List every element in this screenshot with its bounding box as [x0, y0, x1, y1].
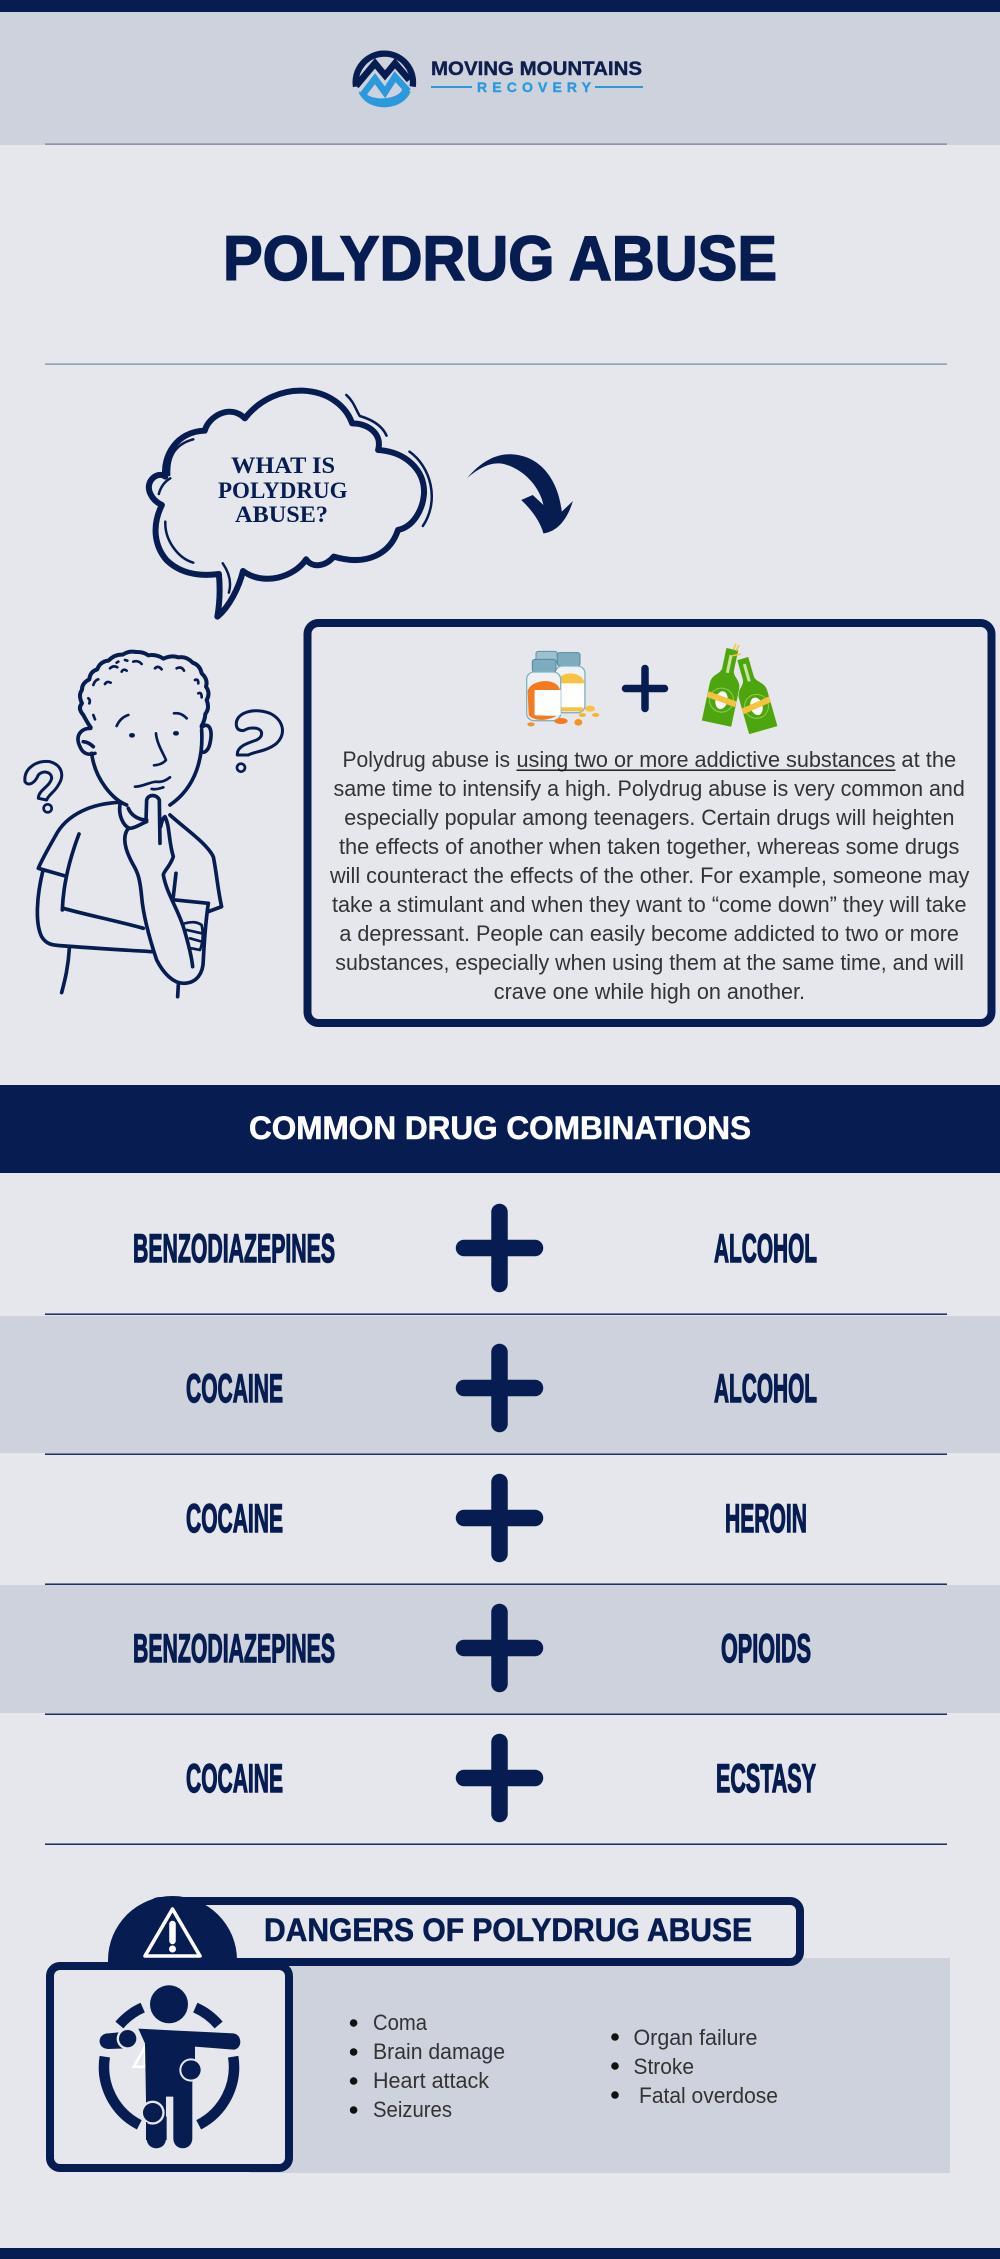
dangers list column 2: Fatal overdose — [639, 2083, 778, 2108]
dangers list column 1: Seizures — [373, 2097, 452, 2122]
row 2: cocaine plus alcohol: COCAINE — [186, 1367, 283, 1411]
bubble text: POLYDRUG — [218, 478, 348, 503]
hand and arm — [120, 795, 208, 983]
dangers list column 1: Coma — [373, 2010, 428, 2035]
definition text: Polydrug abuse is — [342, 747, 510, 772]
definition text: will counteract the effects of the other. For example, someone may — [329, 863, 969, 888]
logo wordmark: MOVING MOUNTAINS — [431, 58, 642, 80]
logo wordmark — [431, 58, 643, 95]
panel: dangers of polydrug abuse — [50, 1896, 950, 2173]
bubble text: ABUSE? — [235, 502, 328, 527]
face and ears — [78, 725, 211, 805]
definition text: especially popular among teenagers. Certain drugs will heighten — [344, 805, 954, 830]
row 2: cocaine plus alcohol: ALCOHOL — [714, 1367, 817, 1411]
hair — [80, 652, 208, 727]
icon: plus — [626, 668, 664, 708]
logo wordmark: RECOVERY — [477, 79, 592, 95]
panel: definition box — [308, 623, 992, 1023]
definition text: crave one while high on another. — [494, 979, 805, 1004]
dangers gray panel — [250, 1958, 950, 2173]
speech bubble: what is polydrug abuse — [149, 391, 432, 617]
thinking person illustration — [25, 652, 282, 997]
top bar — [0, 0, 1000, 12]
definition text: at the — [901, 747, 956, 772]
row 5: cocaine plus ecstasy — [186, 1742, 816, 1814]
definition text: using two or more addictive substances — [516, 747, 896, 772]
logo icon — [356, 54, 413, 107]
definition text — [329, 747, 969, 1004]
row 3: cocaine plus heroin — [186, 1482, 807, 1554]
arrow pointing to definition — [467, 454, 573, 533]
dangers heading box — [150, 1901, 800, 1962]
row 4: benzodiazepines plus opioids — [0, 1585, 1000, 1713]
row 1: benzodiazepines plus alcohol: BENZODIAZEPINES — [133, 1227, 335, 1271]
dangers list column 2 — [611, 2025, 778, 2108]
row 1: benzodiazepines plus alcohol — [133, 1212, 817, 1284]
dangers list column 1: Heart attack — [373, 2068, 490, 2093]
section heading: common drug combinations — [0, 1085, 1000, 1173]
definition text: take a stimulant and when they want to “come down” they will take — [332, 892, 967, 917]
shirt and body — [37, 802, 222, 997]
question mark right — [236, 711, 282, 755]
dangers list column 1 — [350, 2010, 505, 2122]
dangers list column 2: Stroke — [634, 2054, 694, 2079]
row 2: cocaine plus alcohol — [0, 1316, 1000, 1453]
dangers heading box: DANGERS OF POLYDRUG ABUSE — [264, 1912, 752, 1948]
row 5: cocaine plus ecstasy: COCAINE — [186, 1757, 283, 1801]
icon: beer bottles — [702, 644, 778, 735]
dangers list column 2: Organ failure — [634, 2025, 758, 2050]
body pain icon box — [50, 1966, 289, 2168]
icon: pill bottles — [527, 651, 599, 726]
header band with logo — [0, 12, 1000, 145]
title: POLYDRUG ABUSE — [223, 224, 777, 294]
question mark left — [25, 761, 62, 800]
row 3: cocaine plus heroin: HEROIN — [725, 1497, 807, 1541]
definition text: substances, especially when using them at the same time, and will — [335, 950, 964, 975]
icon: body with pain points — [100, 1985, 240, 2148]
warning icon dome — [108, 1896, 237, 1964]
row 3: cocaine plus heroin: COCAINE — [186, 1497, 283, 1541]
row 5: cocaine plus ecstasy: ECSTASY — [716, 1757, 816, 1801]
bottom bar — [0, 2248, 1000, 2259]
row 4: benzodiazepines plus opioids: BENZODIAZEPINES — [133, 1627, 335, 1671]
bubble text — [218, 453, 348, 527]
row 1: benzodiazepines plus alcohol: ALCOHOL — [714, 1227, 817, 1271]
bubble text: WHAT IS — [231, 453, 335, 478]
section heading: common drug combinations: COMMON DRUG COMBINATIONS — [249, 1110, 751, 1146]
dangers list column 1: Brain damage — [373, 2039, 505, 2064]
definition text: the effects of another when taken together, whereas some drugs — [339, 834, 959, 859]
definition text: a depressant. People can easily become addicted to two or more — [339, 921, 959, 946]
row 4: benzodiazepines plus opioids: OPIOIDS — [721, 1627, 811, 1671]
definition text: same time to intensify a high. Polydrug abuse is very common and — [334, 776, 965, 801]
